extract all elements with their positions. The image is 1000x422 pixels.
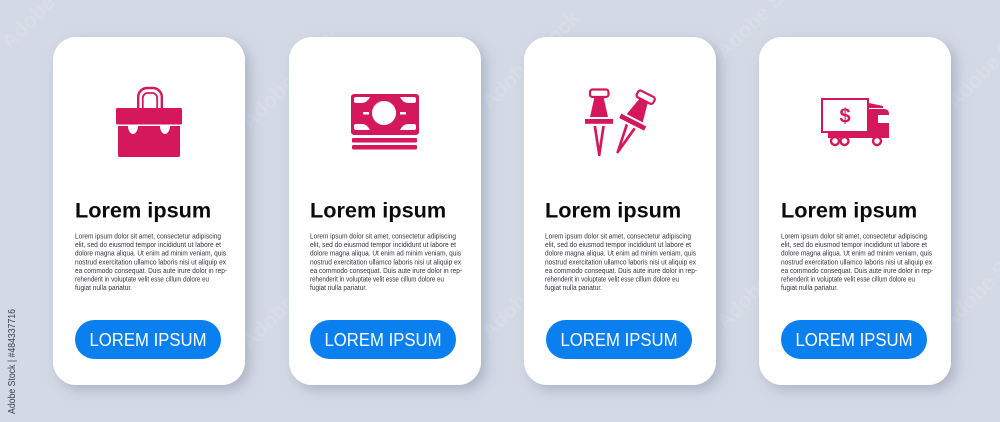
text block: rehenderit in voluptate velit esse cillum dolore eu: [781, 274, 915, 284]
icon: banknote stack: [351, 94, 419, 150]
text block: [781, 232, 933, 292]
text block: ea commodo consequat. Duis aute irure dolor in rep-: [75, 266, 227, 275]
icon: money truck: $: [839, 106, 851, 128]
watermark: Adobe Stock: [712, 226, 820, 334]
text block: [545, 232, 697, 292]
heading: Lorem ipsum: [781, 198, 917, 222]
text block: fugiat nulla pariatur.: [75, 283, 132, 292]
panel: card 3: [524, 37, 716, 385]
text block: dolore magna aliqua. Ut enim ad minim veniam, quis: [545, 249, 696, 258]
button: [546, 320, 692, 359]
panel: card 2: [289, 37, 481, 385]
text block: rehenderit in voluptate velit esse cillum dolore eu: [310, 274, 444, 284]
button: LOREM IPSUM: [796, 330, 912, 350]
panel: card 1: [53, 37, 245, 385]
text block: Lorem ipsum dolor sit amet, consectetur adipiscing: [781, 232, 927, 240]
button: [781, 320, 927, 359]
text block: elit, sed do eiusmod tempor incididunt ut labore et: [781, 240, 927, 249]
text block: Lorem ipsum dolor sit amet, consectetur adipiscing: [75, 232, 221, 240]
text block: ea commodo consequat. Duis aute irure dolor in rep-: [545, 266, 697, 275]
button: LOREM IPSUM: [324, 330, 442, 350]
text block: [75, 232, 227, 292]
text block: rehenderit in voluptate velit esse cillum dolore eu: [75, 274, 209, 284]
icon: briefcase: [116, 88, 182, 157]
watermark: Adobe Stock: [477, 236, 585, 344]
icon: push pins: [585, 87, 660, 159]
text block: nostrud exercitation ullamco laboris nisi ut aliquip ex: [545, 257, 696, 266]
text block: [310, 232, 462, 292]
text block: fugiat nulla pariatur.: [545, 283, 602, 292]
watermark: Adobe Stock: [237, 246, 345, 354]
heading: Lorem ipsum: [310, 198, 446, 222]
text block: nostrud exercitation ullamco laboris nisi ut aliquip ex: [781, 257, 932, 266]
text block: rehenderit in voluptate velit esse cillum dolore eu: [545, 274, 679, 284]
button: LOREM IPSUM: [90, 330, 206, 350]
icon: money truck: [822, 99, 889, 145]
text block: fugiat nulla pariatur.: [781, 283, 838, 292]
text block: dolore magna aliqua. Ut enim ad minim veniam, quis: [781, 249, 932, 258]
text block: nostrud exercitation ullamco laboris nisi ut aliquip ex: [310, 257, 461, 266]
text block: dolore magna aliqua. Ut enim ad minim veniam, quis: [310, 249, 461, 258]
text block: dolore magna aliqua. Ut enim ad minim veniam, quis: [75, 249, 226, 258]
text block: elit, sed do eiusmod tempor incididunt ut labore et: [310, 240, 456, 249]
heading: Lorem ipsum: [75, 198, 211, 222]
side credit: Adobe Stock | #484337716: [7, 309, 18, 414]
text block: Lorem ipsum dolor sit amet, consectetur adipiscing: [310, 232, 456, 240]
button: [75, 320, 221, 359]
text block: elit, sed do eiusmod tempor incididunt ut labore et: [75, 240, 221, 249]
text block: elit, sed do eiusmod tempor incididunt ut labore et: [545, 240, 691, 249]
text block: ea commodo consequat. Duis aute irure dolor in rep-: [310, 266, 462, 275]
text block: Lorem ipsum dolor sit amet, consectetur adipiscing: [545, 232, 691, 240]
panel: card 4: [759, 37, 951, 385]
text block: ea commodo consequat. Duis aute irure dolor in rep-: [781, 266, 933, 275]
heading: Lorem ipsum: [545, 198, 681, 222]
watermark: Adobe Stock: [237, 26, 345, 134]
text block: nostrud exercitation ullamco laboris nisi ut aliquip ex: [75, 257, 226, 266]
text block: fugiat nulla pariatur.: [310, 283, 367, 292]
button: LOREM IPSUM: [560, 330, 678, 350]
button: [310, 320, 456, 359]
watermark: Adobe Stock: [477, 6, 585, 114]
